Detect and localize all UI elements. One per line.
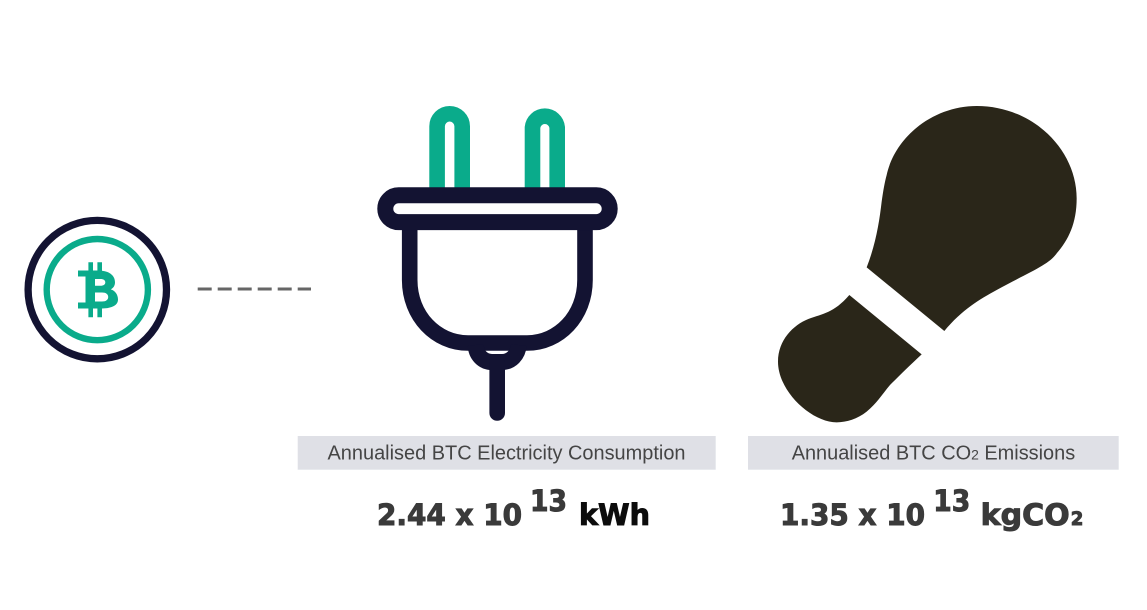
icon: bitcoin coin <box>28 220 166 359</box>
label: electricity consumption <box>298 436 716 470</box>
plug prong right <box>532 116 557 188</box>
label: electricity consumption: Annualised BTC Electricity Consumption <box>328 442 686 464</box>
value: emissions: 1.35 x 10 <box>780 498 925 532</box>
label: CO2 emissions <box>748 436 1119 470</box>
value: electricity: 13 <box>530 484 567 518</box>
value: electricity <box>377 484 650 532</box>
value: emissions: 2 <box>1071 508 1083 530</box>
value: electricity: 2.44 x 10 <box>377 498 522 532</box>
plug cord <box>489 362 505 413</box>
plug top bar <box>385 195 610 222</box>
plug base nub <box>476 345 519 362</box>
value: emissions: kgCO <box>981 498 1070 532</box>
icon: electric plug <box>385 114 610 413</box>
value: electricity: kWh <box>579 498 650 532</box>
value: emissions <box>780 484 1083 532</box>
label: CO2 emissions: Annualised BTC CO2 Emissions <box>792 442 1075 464</box>
plug body <box>410 222 585 343</box>
dashed connector <box>198 288 311 290</box>
icon: carbon footprint <box>778 106 1077 422</box>
value: emissions: 13 <box>933 484 970 518</box>
plug prong left <box>437 114 462 188</box>
